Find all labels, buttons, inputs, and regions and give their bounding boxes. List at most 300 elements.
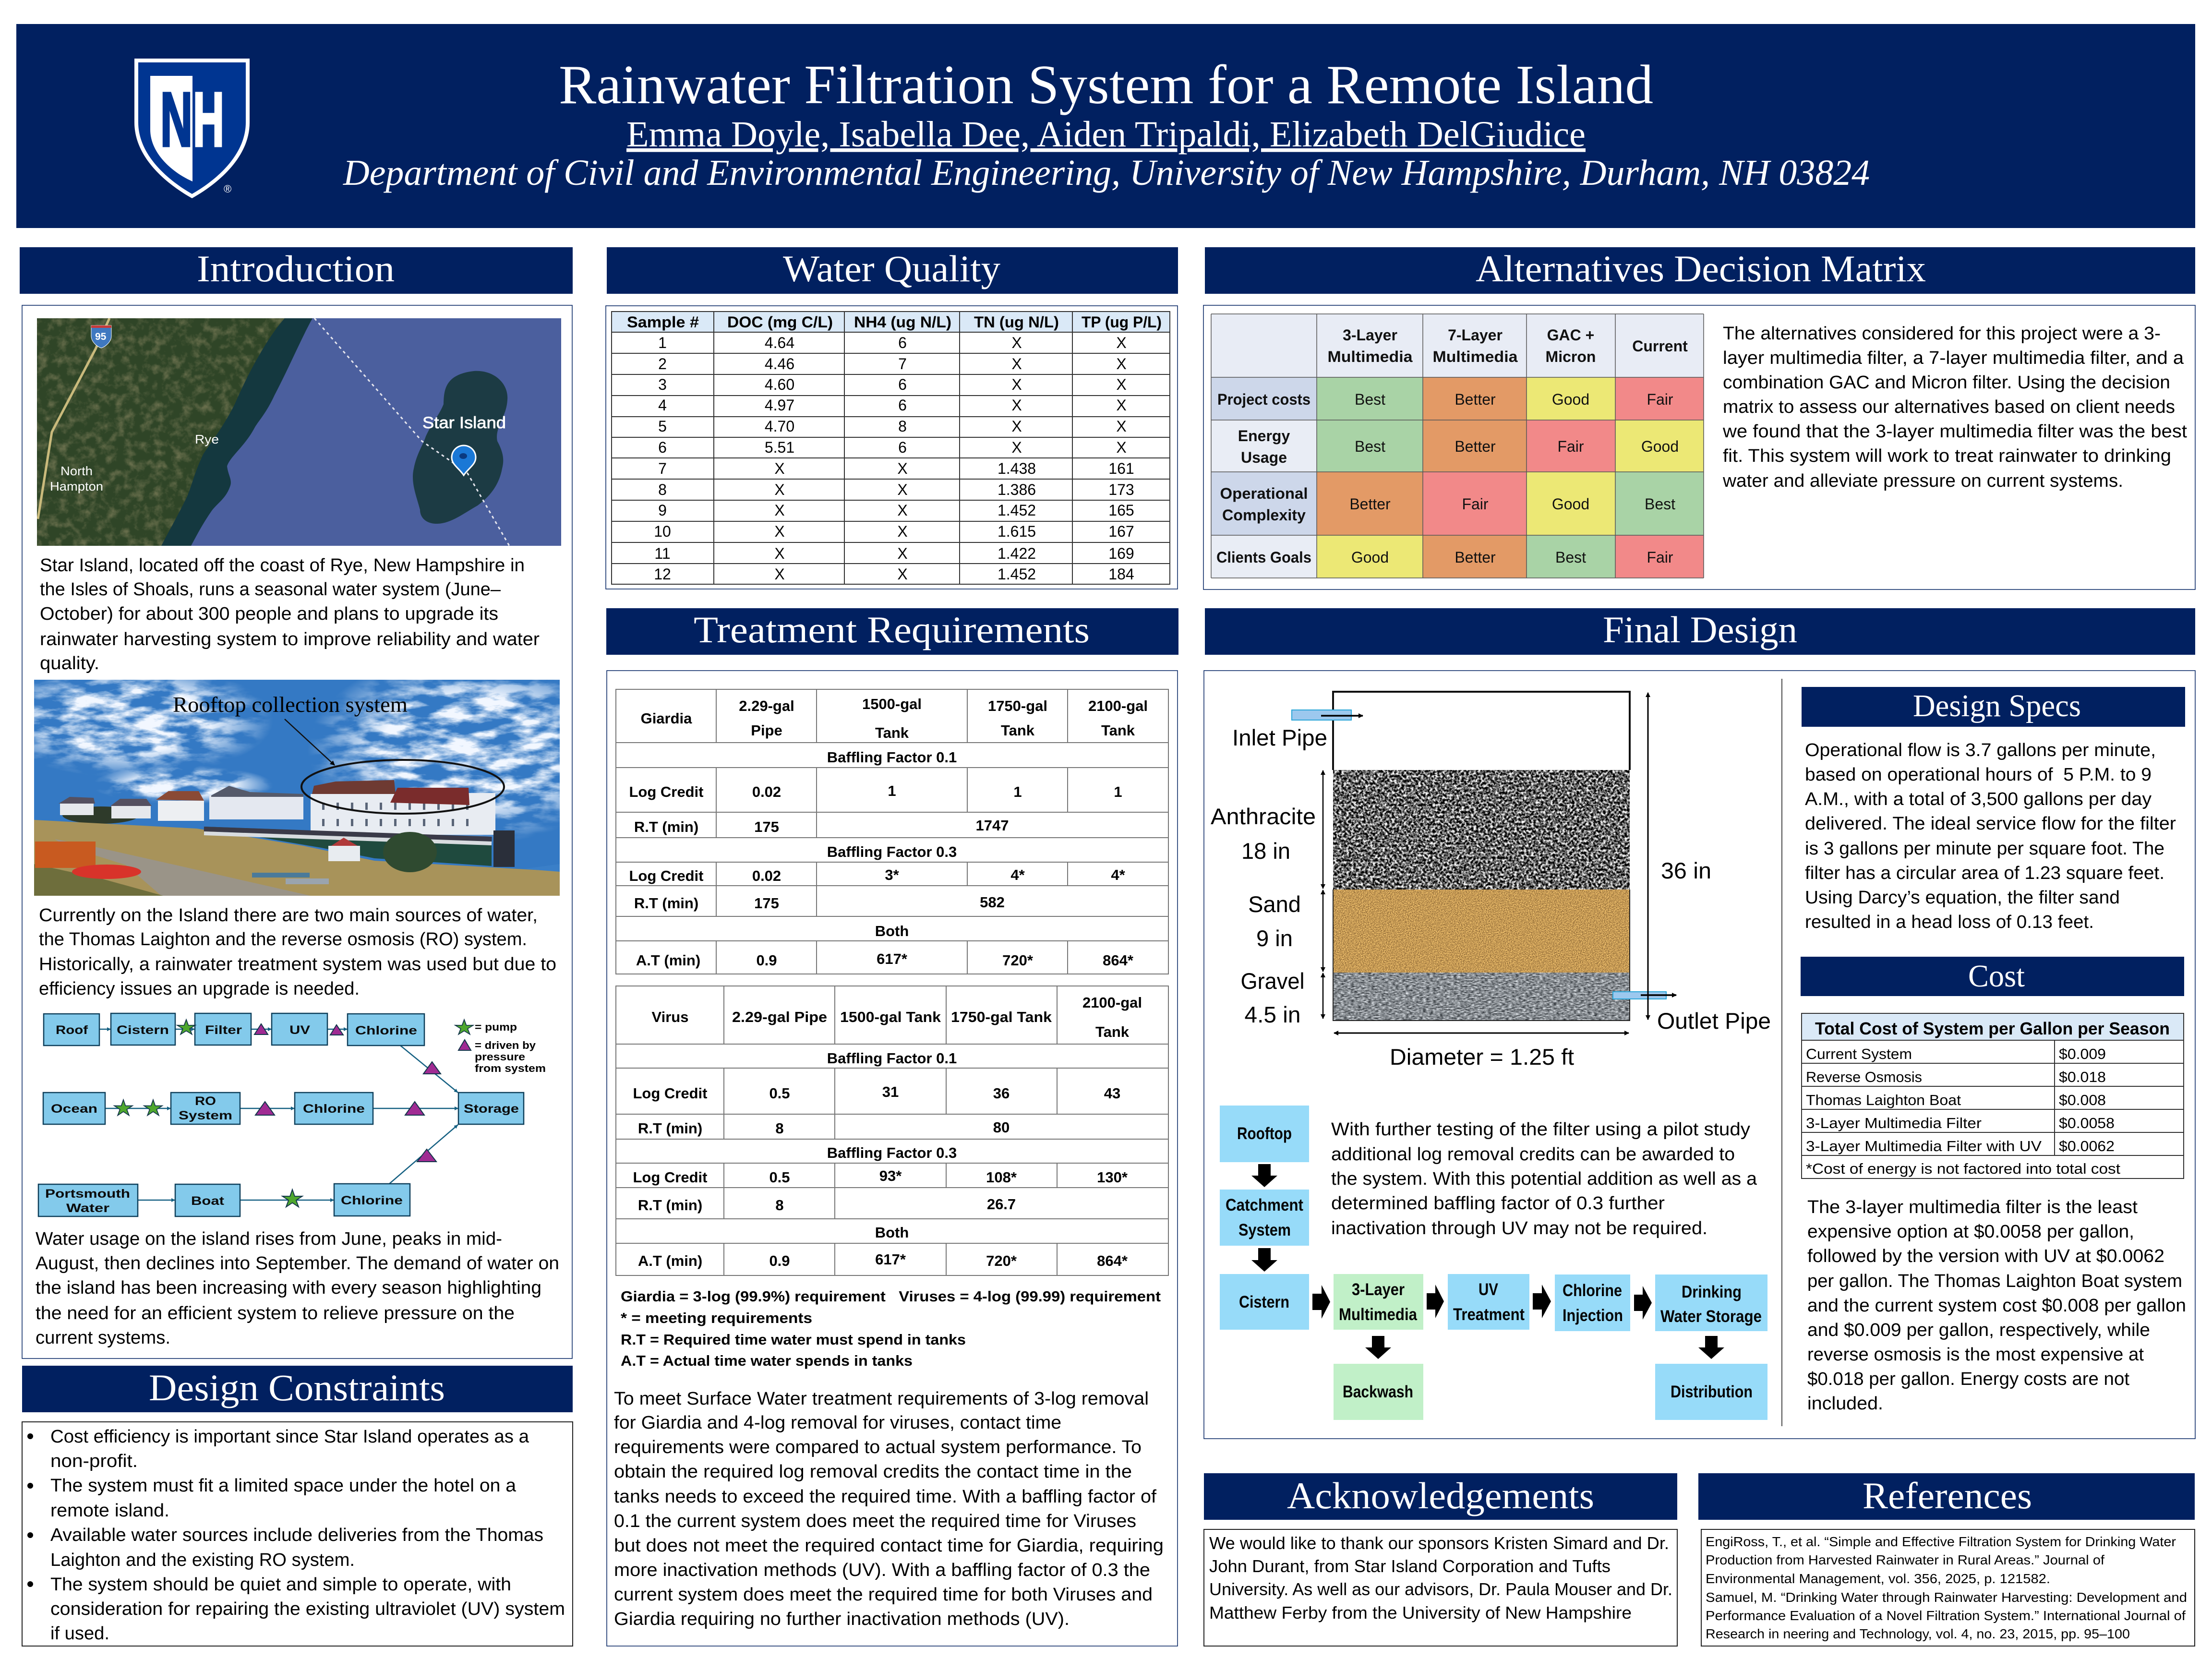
table: decision matrix: Good xyxy=(1351,549,1389,566)
table: Giardia: 2.29-gal xyxy=(739,697,794,714)
flow diagram: current water system: Chlorine xyxy=(303,1102,365,1116)
flow diagram: treatment process: Chlorine xyxy=(1563,1281,1622,1300)
text: cost discussion: per gallon. The Thomas Laighton Boat system xyxy=(1807,1271,2182,1291)
panel: water quality table: 10 xyxy=(654,523,671,540)
table: cost per gallon: $0.009 xyxy=(2059,1046,2106,1062)
flow diagram: treatment process: Distribution xyxy=(1671,1382,1753,1401)
table: cost per gallon: Total Cost of System per Gallon per Season xyxy=(1815,1019,2170,1038)
table: cost per gallon xyxy=(1802,1013,2184,1178)
text: alternatives description: we found that the 3-layer multimedia filter was the best xyxy=(1722,421,2187,442)
heading: Treatment Requirements xyxy=(606,608,1178,655)
flow diagram: current water system: Roof xyxy=(56,1023,88,1037)
text: current water sources: Historically, a rainwater treatment system was used but due to xyxy=(39,954,556,974)
text: treatment discussion xyxy=(614,1389,1164,1629)
table: Giardia: 1500-gal xyxy=(862,696,922,712)
table: Virus: 617* xyxy=(875,1251,906,1268)
department: Department of Civil and Environmental Engineering, University of New Hampshire, Durham, NH 03824 xyxy=(343,153,1870,193)
panel: water quality table: X xyxy=(1011,397,1022,414)
table: decision matrix: Fair xyxy=(1647,391,1673,408)
panel: water quality table: 11 xyxy=(654,545,671,562)
flow diagram: treatment process: Treatment xyxy=(1453,1305,1525,1324)
text: treatment discussion: Giardia requiring no further inactivation methods (UV). xyxy=(614,1609,1070,1629)
panel: references: Environmental Management, vol. 356, 2025, p. 121582. xyxy=(1706,1571,2050,1586)
diagram: filter cross-section: Inlet Pipe xyxy=(1232,725,1327,750)
panel: water quality table: X xyxy=(1116,418,1127,435)
photo: hotel with rooftop collection system xyxy=(34,680,560,896)
text: current water sources: the Thomas Laighton and the reverse osmosis (RO) system. xyxy=(39,929,527,950)
legend: = pump xyxy=(475,1021,517,1033)
table: Virus: Baffling Factor 0.1 xyxy=(827,1050,957,1067)
table: Virus: A.T (min) xyxy=(638,1252,702,1269)
callout: rooftop collection system: Rooftop collection system xyxy=(173,692,408,717)
heading: Design Specs: Design Specs xyxy=(1913,688,2081,723)
panel: water quality table: 6 xyxy=(898,439,907,456)
icon: UNH shield logo xyxy=(134,59,250,198)
table: Virus xyxy=(616,986,1168,1275)
table: Giardia: 1 xyxy=(888,782,896,799)
table: Giardia: R.T (min) xyxy=(634,895,698,912)
table: Virus: R.T (min) xyxy=(638,1120,702,1137)
table: Giardia: Tank xyxy=(1001,722,1035,739)
table: cost per gallon: $0.0062 xyxy=(2059,1138,2115,1154)
table: decision matrix: Project costs xyxy=(1217,391,1310,408)
table: Giardia: 582 xyxy=(980,894,1005,911)
table: decision matrix: Complexity xyxy=(1222,506,1306,524)
panel: design constraints: if used. xyxy=(50,1623,109,1644)
panel: water quality table: 6 xyxy=(658,439,667,456)
table: Virus: 0.5 xyxy=(769,1085,790,1102)
table: Virus: 864* xyxy=(1097,1252,1128,1269)
table: Giardia: 4* xyxy=(1010,866,1025,883)
text: pilot study: inactivation through UV may not be required. xyxy=(1331,1218,1707,1238)
flow diagram: current water system xyxy=(38,1013,546,1216)
text: pilot study: the system. With this potential addition as well as a xyxy=(1331,1169,1757,1189)
table: Giardia: 4* xyxy=(1111,866,1126,883)
text: alternatives description: fit. This system will work to treat rainwater to drinking xyxy=(1723,446,2171,466)
panel: alternatives decision matrix xyxy=(1203,305,2195,589)
panel: water quality table: 165 xyxy=(1108,502,1134,519)
panel: acknowledgements xyxy=(1204,1529,1677,1646)
table: Giardia: Baffling Factor 0.1 xyxy=(827,749,957,766)
heading: Cost: Cost xyxy=(1968,959,2025,994)
icon: UNH shield logo: ® xyxy=(224,183,231,195)
heading: Acknowledgements xyxy=(1204,1473,1677,1520)
flow diagram: current water system: UV xyxy=(289,1023,310,1037)
table: decision matrix: Operational xyxy=(1220,485,1308,502)
panel: water quality table: 1.452 xyxy=(998,565,1036,583)
table notes xyxy=(621,1288,1161,1369)
table: Giardia: R.T (min) xyxy=(634,818,698,835)
table: Giardia: 617* xyxy=(877,950,908,967)
heading: References xyxy=(1698,1473,2195,1520)
panel: acknowledgements: University. As well as our advisors, Dr. Paula Mouser and Dr. xyxy=(1209,1579,1672,1599)
panel: water quality table: X xyxy=(897,460,908,477)
flow diagram: treatment process: Backwash xyxy=(1343,1382,1413,1401)
flow diagram: treatment process: Cistern xyxy=(1239,1293,1289,1311)
map of Star Island: Rye xyxy=(195,432,219,446)
panel: water quality table: 1.422 xyxy=(998,545,1036,562)
panel: water quality table: NH4 (ug N/L) xyxy=(854,313,951,331)
panel: water quality table: 161 xyxy=(1108,460,1134,477)
panel: water quality table: X xyxy=(774,523,785,540)
table notes: Giardia = 3-log (99.9%) requirement Viruses = 4-log (99.99) requirement xyxy=(621,1288,1161,1305)
table: Giardia: 175 xyxy=(754,895,779,912)
table notes: * = meeting requirements xyxy=(621,1310,812,1326)
flow diagram: treatment process: System xyxy=(1238,1221,1291,1239)
heading: Acknowledgements: Acknowledgements xyxy=(1287,1475,1594,1516)
panel: water quality table: 1.386 xyxy=(998,481,1036,498)
table: decision matrix: Good xyxy=(1641,438,1679,455)
text: design specs: Operational flow is 3.7 gallons per minute, xyxy=(1805,740,2156,760)
flow diagram: treatment process: 3-Layer xyxy=(1352,1280,1405,1299)
text: design specs: A.M., with a total of 3,500 gallons per day xyxy=(1805,789,2152,809)
table: Giardia: 0.02 xyxy=(752,783,781,800)
heading: References: References xyxy=(1863,1475,2032,1516)
panel: references: Samuel, M. “Drinking Water through Rainwater Harvesting: Development and xyxy=(1706,1590,2187,1605)
panel: water quality table: 4.46 xyxy=(765,355,794,373)
text: island description: quality. xyxy=(40,653,99,673)
table: Virus: 108* xyxy=(986,1169,1017,1186)
panel: water quality table: 1.615 xyxy=(998,523,1036,540)
panel: water quality table: 6 xyxy=(898,376,907,393)
table: decision matrix: Multimedia xyxy=(1432,348,1518,365)
table: Virus: Log Credit xyxy=(633,1169,708,1186)
text: current water sources: Currently on the Island there are two main sources of water, xyxy=(39,905,538,926)
diagram: filter cross-section: 36 in xyxy=(1661,858,1711,883)
panel: design constraints: non-profit. xyxy=(50,1451,138,1471)
panel: water quality table: Sample # xyxy=(627,313,699,331)
text: alternatives description: matrix to assess our alternatives based on client needs xyxy=(1723,397,2175,417)
panel: water quality table: 184 xyxy=(1108,565,1134,583)
text: cost discussion xyxy=(1807,1197,2186,1414)
flow diagram: treatment process: Drinking xyxy=(1682,1283,1742,1301)
text: cost discussion: reverse osmosis is the most expensive at xyxy=(1807,1345,2144,1365)
panel: water quality table: X xyxy=(897,565,908,583)
heading: Water Quality: Water Quality xyxy=(783,248,1000,289)
table: Virus: Both xyxy=(875,1224,909,1241)
table notes: R.T = Required time water must spend in tanks xyxy=(621,1331,966,1348)
heading: Cost xyxy=(1801,957,2184,996)
diagram: filter cross-section: Diameter = 1.25 ft xyxy=(1390,1044,1574,1070)
text: island description: Star Island, located off the coast of Rye, New Hampshire in xyxy=(40,555,525,576)
panel: design constraints: Laighton and the existing RO system. xyxy=(50,1550,355,1570)
panel: water quality table: TN (ug N/L) xyxy=(974,313,1059,331)
panel: design constraints: Cost efficiency is important since Star Island operates as a xyxy=(50,1427,529,1447)
panel: water quality table xyxy=(606,306,1178,589)
flow diagram: current water system: Cistern xyxy=(117,1023,169,1037)
panel: references: EngiRoss, T., et al. “Simple and Effective Filtration System for Drinking Water xyxy=(1706,1534,2176,1549)
diagram: filter cross-section xyxy=(1211,692,1771,1070)
table: cost per gallon: $0.008 xyxy=(2059,1092,2106,1108)
flow diagram: current water system: Chlorine xyxy=(355,1024,417,1037)
text: current water sources: efficiency issues an upgrade is needed. xyxy=(39,979,360,999)
table: decision matrix: Fair xyxy=(1647,549,1673,566)
text: treatment discussion: but does not meet the required contact time for Giardia, requiring xyxy=(614,1536,1164,1556)
legend: pressure xyxy=(475,1051,525,1063)
panel: water quality table: 169 xyxy=(1108,545,1134,562)
panel: design constraints: Available water sources include deliveries from the Thomas xyxy=(50,1525,543,1545)
table: Giardia: 1747 xyxy=(976,817,1009,834)
panel: water quality table: X xyxy=(1116,334,1127,351)
text: water usage: August, then declines into September. The demand of water on xyxy=(36,1253,559,1274)
panel: water quality table: 167 xyxy=(1108,523,1134,540)
heading: Design Constraints xyxy=(22,1366,573,1412)
text: cost discussion: followed by the version with UV at $0.0062 xyxy=(1807,1246,2164,1266)
table notes: A.T = Actual time water spends in tanks xyxy=(621,1352,913,1369)
table: Virus: 0.9 xyxy=(769,1252,790,1269)
table: Virus: Tank xyxy=(1095,1023,1130,1040)
panel: design constraints: remote island. xyxy=(50,1501,169,1521)
table: decision matrix: Multimedia xyxy=(1328,348,1413,365)
panel: introduction xyxy=(22,305,572,1358)
text: design specs: filter has a circular area of 1.23 square feet. xyxy=(1805,863,2164,883)
text: island description: the Isles of Shoals, runs a seasonal water system (June– xyxy=(40,579,501,600)
table: cost per gallon: *Cost of energy is not factored into total cost xyxy=(1806,1160,2120,1177)
flow diagram: current water system: Ocean xyxy=(51,1102,97,1116)
table: decision matrix: Better xyxy=(1455,438,1496,455)
panel: water quality table: 4.97 xyxy=(765,397,794,414)
flow diagram: treatment process: Catchment xyxy=(1226,1196,1303,1214)
table: Giardia: Pipe xyxy=(751,722,782,739)
callout: rooftop collection system xyxy=(173,692,504,814)
table: Giardia: Tank xyxy=(1101,722,1135,739)
panel: water quality table: 4.60 xyxy=(765,376,794,393)
panel: acknowledgements: John Durant, from Star Island Corporation and Tufts xyxy=(1209,1556,1611,1576)
table: decision matrix: Energy xyxy=(1238,427,1290,445)
table: Virus: 26.7 xyxy=(987,1196,1016,1213)
table: Virus: 2100-gal xyxy=(1082,994,1142,1011)
text: treatment discussion: for Giardia and 4-log removal for viruses, contact time xyxy=(614,1413,1061,1433)
panel: water quality table: X xyxy=(897,523,908,540)
table: Virus: 80 xyxy=(993,1119,1010,1136)
diagram: filter cross-section: Sand xyxy=(1248,891,1301,917)
panel: water quality table: 4.70 xyxy=(765,418,794,435)
table: Giardia: 2100-gal xyxy=(1088,697,1148,714)
text: cost discussion: included. xyxy=(1807,1394,1883,1414)
table: cost per gallon: 3-Layer Multimedia Filter with UV xyxy=(1806,1138,2042,1154)
panel: water quality table: X xyxy=(897,545,908,562)
panel: water quality table: 4.64 xyxy=(765,334,794,351)
table: Giardia: Log Credit xyxy=(629,867,704,884)
table: Giardia xyxy=(616,689,1168,974)
table: Virus: 8 xyxy=(775,1197,784,1214)
table: decision matrix: 3-Layer xyxy=(1343,326,1397,344)
table: decision matrix: Clients Goals xyxy=(1216,549,1311,566)
flow diagram: current water system: RO xyxy=(195,1094,216,1108)
text: current water sources xyxy=(39,905,556,999)
map of Star Island: Star Island xyxy=(422,414,506,432)
flow diagram: treatment process: Injection xyxy=(1563,1306,1623,1325)
table: Virus: Log Credit xyxy=(633,1085,708,1102)
heading: Water Quality xyxy=(607,247,1178,294)
icon: UNH shield logo: N xyxy=(160,76,192,162)
panel: water quality table: X xyxy=(774,545,785,562)
authors: Emma Doyle, Isabella Dee, Aiden Tripaldi, Elizabeth DelGiudice xyxy=(626,114,1586,155)
table: Virus: Baffling Factor 0.3 xyxy=(827,1144,957,1161)
flow diagram: current water system: Water xyxy=(66,1202,109,1215)
flow diagram: current water system: Filter xyxy=(205,1023,242,1037)
text: design specs: is 3 gallons per minute per square foot. The xyxy=(1805,839,2164,859)
table: Giardia: 3* xyxy=(885,866,900,883)
flow diagram: treatment process: Rooftop xyxy=(1237,1124,1292,1143)
table: Virus: Virus xyxy=(652,1009,688,1025)
panel: references: Research in neering and Technology, vol. 4, no. 23, 2015, pp. 95–100 xyxy=(1706,1626,2130,1641)
panel: treatment requirements xyxy=(607,671,1178,1646)
panel: water quality table: DOC (mg C/L) xyxy=(727,313,833,331)
flow diagram: current water system: Storage xyxy=(464,1102,519,1116)
panel: final design xyxy=(1204,671,2195,1439)
table: Virus: 8 xyxy=(775,1120,784,1137)
map of Star Island xyxy=(37,318,561,546)
text: treatment discussion: tanks needs to exceed the required time. With a baffling factor of xyxy=(614,1487,1156,1507)
panel: references xyxy=(1701,1529,2195,1646)
text: pilot study xyxy=(1331,1119,1757,1238)
panel: water quality table: X xyxy=(1011,355,1022,373)
table: decision matrix: Good xyxy=(1552,495,1589,513)
heading: Design Specs xyxy=(1802,687,2185,727)
table: Virus: 2.29-gal Pipe xyxy=(732,1009,827,1025)
panel: water quality table: 2 xyxy=(658,355,667,373)
text: cost discussion: $0.018 per gallon. Energy costs are not xyxy=(1807,1369,2129,1389)
heading: Alternatives Decision Matrix: Alternatives Decision Matrix xyxy=(1476,248,1926,289)
table: cost per gallon: $0.018 xyxy=(2059,1069,2106,1085)
table: Virus: 31 xyxy=(882,1083,899,1100)
panel: design constraints: The system should be quiet and simple to operate, with xyxy=(50,1575,511,1595)
table: decision matrix: Best xyxy=(1355,391,1385,408)
table: Giardia: 1750-gal xyxy=(988,697,1047,714)
diagram: filter cross-section: Gravel xyxy=(1240,968,1305,994)
panel: water quality table: 6 xyxy=(898,397,907,414)
diagram: filter cross-section: 4.5 in xyxy=(1244,1002,1301,1027)
table: decision matrix: 7-Layer xyxy=(1448,326,1503,344)
table: Virus: R.T (min) xyxy=(638,1197,702,1214)
panel: water quality table: X xyxy=(1116,355,1127,373)
panel: water quality table: 8 xyxy=(898,418,907,435)
panel: water quality table: X xyxy=(897,502,908,519)
table: Giardia: 175 xyxy=(754,818,779,835)
panel: water quality table: 6 xyxy=(898,334,907,351)
text: water usage: Water usage on the island rises from June, peaks in mid- xyxy=(36,1229,502,1249)
table: decision matrix: Better xyxy=(1455,391,1496,408)
text: alternatives description xyxy=(1722,324,2187,491)
diagram: filter cross-section: Outlet Pipe xyxy=(1657,1008,1771,1034)
panel: water quality table: 7 xyxy=(898,355,907,373)
heading: Final Design xyxy=(1205,608,2195,655)
table: Giardia: Giardia xyxy=(641,710,692,727)
table: decision matrix: Usage xyxy=(1241,449,1287,466)
panel: design constraints xyxy=(22,1422,573,1646)
panel: water quality table: X xyxy=(774,502,785,519)
panel: references: Performance Evaluation of a Novel Filtration System.” International Journal of xyxy=(1706,1608,2186,1623)
table: decision matrix: Best xyxy=(1555,549,1586,566)
map of Star Island: Hampton xyxy=(50,479,103,493)
panel: water quality table: X xyxy=(1011,334,1022,351)
panel: water quality table: X xyxy=(1116,397,1127,414)
text: water usage xyxy=(36,1229,559,1348)
table: cost per gallon: Reverse Osmosis xyxy=(1806,1069,1922,1085)
panel: water quality table: TP (ug P/L) xyxy=(1082,313,1162,331)
table: decision matrix: Better xyxy=(1455,549,1496,566)
table: Virus: 0.5 xyxy=(769,1169,790,1186)
text: alternatives description: layer multimedia filter, a 7-layer multimedia filter, and a xyxy=(1723,348,2184,368)
panel: water quality table: 7 xyxy=(658,460,667,477)
table: cost per gallon: Thomas Laighton Boat xyxy=(1806,1092,1961,1108)
text: design specs: Using Darcy’s equation, the filter sand xyxy=(1805,888,2120,908)
diagram: filter cross-section: 18 in xyxy=(1241,838,1290,864)
table: Giardia: 1 xyxy=(1114,783,1122,800)
heading: Final Design: Final Design xyxy=(1603,609,1797,650)
panel: water quality table: X xyxy=(1011,439,1022,456)
panel: references: Production from Harvested Rainwater in Rural Areas.” Journal of xyxy=(1706,1552,2104,1567)
panel: water quality table: X xyxy=(774,481,785,498)
table: Virus: 43 xyxy=(1104,1085,1120,1102)
table: decision matrix: Better xyxy=(1349,495,1391,513)
text: alternatives description: combination GAC and Micron filter. Using the decision xyxy=(1723,373,2170,393)
text: island description: October) for about 300 people and plans to upgrade its xyxy=(40,604,498,624)
panel: water quality table: 3 xyxy=(658,376,667,393)
flow diagram: current water system: Boat xyxy=(191,1194,225,1208)
table: decision matrix: Micron xyxy=(1546,348,1596,365)
panel: water quality table: 9 xyxy=(658,502,667,519)
panel: water quality table: 1.438 xyxy=(998,460,1036,477)
text: cost discussion: expensive option at $0.0058 per gallon, xyxy=(1807,1222,2134,1242)
legend: from system xyxy=(475,1062,546,1074)
table: Virus: 36 xyxy=(993,1085,1010,1102)
panel: water quality table: 5 xyxy=(658,418,667,435)
flow diagram: treatment process: UV xyxy=(1479,1280,1499,1299)
text: treatment discussion: obtain the required log removal credits the contact time in the xyxy=(614,1462,1132,1482)
table: decision matrix: Fair xyxy=(1462,495,1489,513)
panel: water quality table: 1.452 xyxy=(998,502,1036,519)
table: cost per gallon: 3-Layer Multimedia Filter xyxy=(1806,1115,1982,1131)
flow diagram: treatment process: Water Storage xyxy=(1660,1307,1762,1326)
flow diagram: current water system: System xyxy=(179,1109,232,1122)
panel: water quality table: X xyxy=(1116,376,1127,393)
table: decision matrix: Current xyxy=(1632,337,1688,355)
text: treatment discussion: more inactivation methods (UV). With a baffling factor of 0.3 the xyxy=(614,1560,1150,1580)
table: decision matrix: Good xyxy=(1552,391,1589,408)
text: alternatives description: water and alleviate pressure on current systems. xyxy=(1722,471,2123,491)
panel: water quality table: 4 xyxy=(658,397,667,414)
panel: water quality table: X xyxy=(1011,376,1022,393)
panel: water quality table: 1 xyxy=(658,334,667,351)
icon: UNH shield logo: H xyxy=(193,76,224,162)
text: island description xyxy=(40,555,540,673)
heading: Introduction xyxy=(20,247,573,294)
table: Giardia: Baffling Factor 0.3 xyxy=(827,843,957,860)
text: treatment discussion: current system does meet the required time for both Viruses and xyxy=(614,1585,1153,1605)
panel: acknowledgements: We would like to thank our sponsors Kristen Simard and Dr. xyxy=(1209,1533,1669,1553)
panel: design constraints: consideration for repairing the existing ultraviolet (UV) system xyxy=(50,1599,565,1619)
diagram: filter cross-section: Anthracite xyxy=(1211,804,1316,829)
panel: water quality table: 12 xyxy=(654,565,671,583)
table: Giardia: A.T (min) xyxy=(636,952,700,969)
table: decision matrix: GAC + xyxy=(1547,326,1594,344)
panel: water quality table: X xyxy=(774,460,785,477)
table: decision matrix: Fair xyxy=(1557,438,1584,455)
legend: = driven by xyxy=(475,1039,536,1051)
table: decision matrix xyxy=(1211,314,1704,578)
panel: water quality table: 173 xyxy=(1108,481,1134,498)
text: design specs: delivered. The ideal service flow for the filter xyxy=(1805,814,2176,834)
heading: Alternatives Decision Matrix xyxy=(1205,247,2195,294)
table: Virus: 1500-gal Tank xyxy=(840,1009,941,1025)
panel: water quality table: X xyxy=(1116,439,1127,456)
text: pilot study: determined baffling factor of 0.3 further xyxy=(1331,1193,1665,1214)
map of Star Island: North xyxy=(60,464,93,478)
table: cost per gallon: Current System xyxy=(1806,1046,1912,1062)
table: Giardia: Log Credit xyxy=(629,783,704,800)
